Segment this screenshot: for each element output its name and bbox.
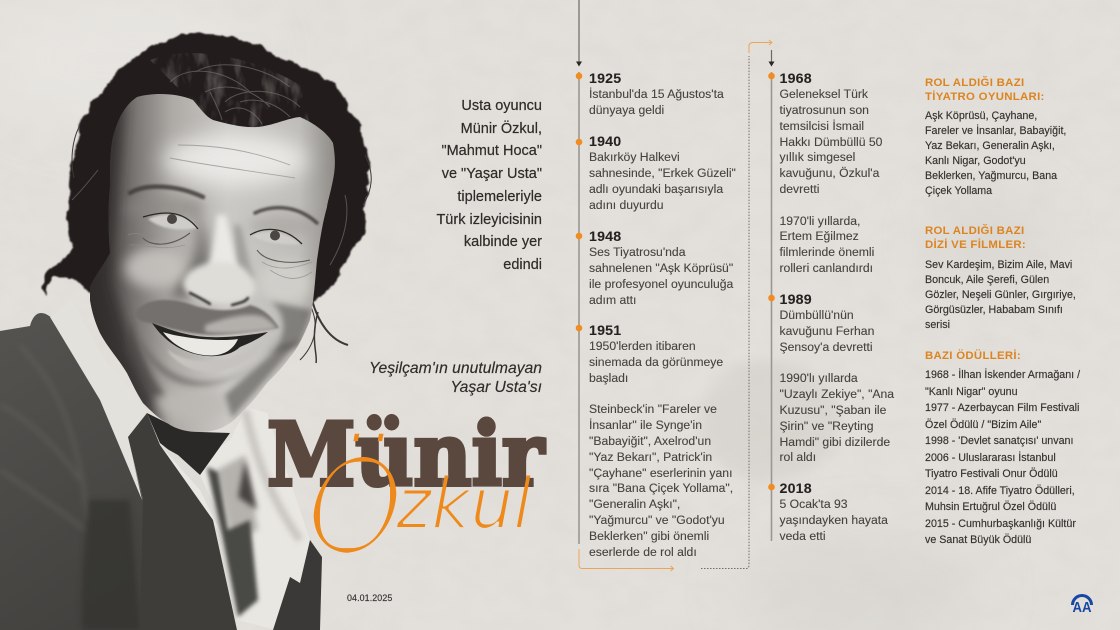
timeline entry 1940: adını duyurdu xyxy=(589,198,664,212)
eyebrows xyxy=(130,187,317,223)
timeline entry 1968: tiyatrosunun son xyxy=(780,103,869,117)
timeline entry 1989: Hamdi" gibi dizilerde xyxy=(780,435,890,449)
heading: series and films: ROL ALDIĞI BAZI xyxy=(925,225,1024,237)
timeline entry 1940: Bakırköy Halkevi xyxy=(589,150,680,164)
list: series and films: Boncuk, Aile Şerefi, Gülen xyxy=(925,274,1049,286)
timeline entry 1951: Beklerken" gibi önemli xyxy=(589,529,709,543)
timeline entry 1989: rol aldı xyxy=(780,450,816,464)
timeline entry 1968: devretti xyxy=(780,182,819,196)
list: awards: 1977 - Azerbaycan Film Festivali xyxy=(925,402,1079,414)
timeline entry 1925: 1925 xyxy=(589,70,621,86)
timeline entry 1989: kavuğunu Ferhan xyxy=(780,324,874,338)
timeline entry 1940: sahnesinde, "Erkek Güzeli" xyxy=(589,166,736,180)
timeline entry 1968: 1970'li yıllarda, xyxy=(780,214,860,228)
intro text: edindi xyxy=(503,257,542,273)
portrait photograph of Münir Özkul xyxy=(0,31,372,630)
timeline entry 1948: ile profesyonel oyunculuğa xyxy=(589,277,733,291)
intro text: Türk izleyicisinin xyxy=(436,212,542,228)
timeline entry 1951: başladı xyxy=(589,371,628,385)
timeline entry 1968: Geleneksel Türk xyxy=(780,87,868,101)
heading: awards: BAZI ÖDÜLLERİ: xyxy=(925,350,1021,362)
list: awards: 2014 - 18. Afife Tiyatro Ödülleri, xyxy=(925,484,1075,496)
timeline entry 1968: rolleri canlandırdı xyxy=(780,261,873,275)
timeline entry 1989: 1989 xyxy=(780,292,812,308)
timeline connector lines and arrows xyxy=(576,0,775,572)
timeline entry 1940 xyxy=(589,134,736,212)
intro text: tiplemeleriyle xyxy=(457,189,542,205)
italic subtitle: Yeşilçam'ın unutulmayan xyxy=(369,360,542,377)
shirt and collar xyxy=(50,300,147,500)
hair highlights xyxy=(72,65,347,265)
jacket right xyxy=(273,540,322,630)
heading: theatre plays: ROL ALDIĞI BAZI xyxy=(925,77,1024,89)
timeline entry 2018: 2018 xyxy=(780,480,812,496)
list: theatre plays xyxy=(925,110,1066,197)
smile xyxy=(152,323,268,356)
list: awards: ve Sanat Büyük Ödülü xyxy=(925,534,1031,546)
timeline entry 1951: sinemada da görünmeye xyxy=(589,355,723,369)
list: theatre plays: Beklerken, Yağmurcu, Bana xyxy=(925,170,1057,182)
timeline entry 1948: adım attı xyxy=(589,293,636,307)
heading: theatre plays xyxy=(925,76,1045,103)
italic subtitle: Yaşar Usta'sı xyxy=(450,379,542,396)
timeline entry 1951: 1950'lerden itibaren xyxy=(589,339,696,353)
heading: theatre plays: TİYATRO OYUNLARI: xyxy=(925,91,1045,103)
timeline entry 1948: 1948 xyxy=(589,228,621,244)
timeline entry 1989: 1990'lı yıllarda xyxy=(780,371,858,385)
jacket sleeve fold shading xyxy=(0,345,88,530)
timeline entry 1989: Kuzusu", "Şaban ile xyxy=(780,403,886,417)
title name xyxy=(267,403,547,580)
timeline entry 1951: "Yaz Bekarı", Patrick'in xyxy=(589,450,712,464)
timeline entry 1989: Şensoy'a devretti xyxy=(780,340,873,354)
nose xyxy=(183,262,255,304)
dotted connector xyxy=(701,56,749,568)
list: awards: 2006 - Uluslararası İstanbul xyxy=(925,452,1056,464)
script: Özkul: zkul xyxy=(395,463,533,545)
right timeline rail xyxy=(770,72,772,541)
timeline entry 2018: veda etti xyxy=(780,529,826,543)
timeline entry 1925 xyxy=(589,70,724,117)
list: awards: 2015 - Cumhurbaşkanlığı Kültür xyxy=(925,518,1076,530)
tie xyxy=(207,467,258,617)
timeline entry 1968: temsilcisi İsmail xyxy=(780,119,864,133)
script: Özkul xyxy=(305,429,533,586)
timeline entry 1948: sahnelenen "Aşk Köprüsü" xyxy=(589,261,733,275)
timeline dots xyxy=(576,73,775,490)
timeline entry 1989 xyxy=(780,292,894,464)
first arrow xyxy=(576,0,582,66)
list: series and films xyxy=(925,258,1076,330)
list: theatre plays: Kanlı Nigar, Godot'yu xyxy=(925,154,1026,166)
list: awards: "Kanlı Nigar" oyunu xyxy=(925,386,1018,398)
list: theatre plays: Aşk Köprüsü, Çayhane, xyxy=(925,110,1037,122)
heading: series and films xyxy=(925,224,1026,251)
timeline entry 1968: Hakkı Dümbüllü 50 xyxy=(780,135,882,149)
moustache xyxy=(135,300,279,335)
timeline entry 1951: İnsanlar" ile Synge'in xyxy=(589,418,702,432)
heading: series and films: DİZİ VE FİLMLER: xyxy=(925,239,1026,251)
timeline entry 1925: dünyaya geldi xyxy=(589,103,664,117)
timeline entry 1940: adlı oyundaki başarısıyla xyxy=(589,182,723,196)
timeline entry 1948 xyxy=(589,228,734,307)
timeline entry 1951: eserlerde de rol aldı xyxy=(589,545,697,559)
timeline entry 1951: sıra "Bana Çiçek Yollama", xyxy=(589,481,733,495)
timeline entry 1948: Ses Tiyatrosu'nda xyxy=(589,245,686,259)
orange connector top xyxy=(749,40,772,53)
timeline entry 2018: yaşındayken hayata xyxy=(780,513,888,527)
timeline entry 1968: yıllık simgesel xyxy=(780,150,855,164)
list: theatre plays: Fareler ve İnsanlar, Babayiğit, xyxy=(925,124,1066,136)
list: awards: 1998 - 'Devlet sanatçısı' unvanı xyxy=(925,435,1073,447)
intro text: "Mahmut Hoca" xyxy=(441,143,542,159)
list: series and films: Gözler, Neşeli Günler, Gırgıriye, xyxy=(925,288,1076,300)
timeline entry 1968: kavuğunu, Özkul'a xyxy=(780,166,879,180)
timeline entry 1951: "Babayiğit", Axelrod'un xyxy=(589,434,711,448)
timeline entry 1951: Steinbeck'in "Fareler ve xyxy=(589,402,717,416)
intro text xyxy=(436,98,542,273)
list: awards: 1968 - İlhan İskender Armağanı / xyxy=(925,369,1080,381)
timeline entry 1951: "Yağmurcu" ve "Godot'yu xyxy=(589,513,725,527)
timeline entry 1968: filmlerinde önemli xyxy=(780,245,874,259)
orange connector bottom xyxy=(579,549,674,571)
icon: AA logo xyxy=(1071,594,1093,614)
list: awards xyxy=(925,368,1080,546)
timeline entry 1968 xyxy=(780,70,882,275)
timeline entry 1989: Dümbüllü'nün xyxy=(780,308,854,322)
list: series and films: Görgüsüzler, Hababam Sınıfı xyxy=(925,304,1063,316)
intro text: kalbinde yer xyxy=(464,234,542,250)
timeline entry 1940: 1940 xyxy=(589,134,621,150)
list: awards: Özel Ödülü / "Bizim Aile" xyxy=(925,418,1041,430)
jacket left xyxy=(0,313,148,630)
list: series and films: serisi xyxy=(925,318,950,330)
timeline entry 1968: Ertem Eğilmez xyxy=(780,229,859,243)
timeline entry 1951: "Çayhane" eserlerinin yanı xyxy=(589,466,732,480)
loose hair strands xyxy=(72,125,371,363)
timeline entry 1951 xyxy=(589,322,733,559)
dark inner jacket xyxy=(128,413,237,630)
intro text: Münir Özkul, xyxy=(461,121,542,137)
second arrow xyxy=(768,50,774,66)
timeline entry 1951: "Generalin Aşkı", xyxy=(589,497,680,511)
timeline entry 2018: 5 Ocak'ta 93 xyxy=(780,497,848,511)
timeline entry 1951: 1951 xyxy=(589,322,621,338)
title: Münir: Münir xyxy=(267,403,545,506)
list: theatre plays: Yaz Bekarı, Generalin Aşkı, xyxy=(925,140,1055,152)
intro text: Usta oyuncu xyxy=(461,98,542,114)
date: 04.01.2025 xyxy=(347,593,392,603)
face xyxy=(90,94,335,432)
face shading and features xyxy=(75,100,316,421)
list: awards: Muhsin Ertuğrul Özel Ödülü xyxy=(925,501,1056,513)
timeline entry 1968: 1968 xyxy=(780,70,812,86)
timeline entry 1989: "Uzaylı Zekiye", "Ana xyxy=(780,387,894,401)
intro text: ve "Yaşar Usta" xyxy=(442,166,542,182)
timeline entry 2018 xyxy=(780,480,888,543)
left timeline rail xyxy=(578,72,580,544)
eyes xyxy=(143,213,310,262)
list: series and films: Sev Kardeşim, Bizim Aile, Mavi xyxy=(925,258,1072,270)
italic subtitle xyxy=(369,360,542,396)
timeline entry 1925: İstanbul'da 15 Ağustos'ta xyxy=(589,87,724,101)
timeline entry 1989: Şirin" ve "Reyting xyxy=(780,419,874,433)
hair xyxy=(42,34,369,310)
list: awards: Tiyatro Festivali Onur Ödülü xyxy=(925,468,1058,480)
list: theatre plays: Çiçek Yollama xyxy=(925,184,992,196)
